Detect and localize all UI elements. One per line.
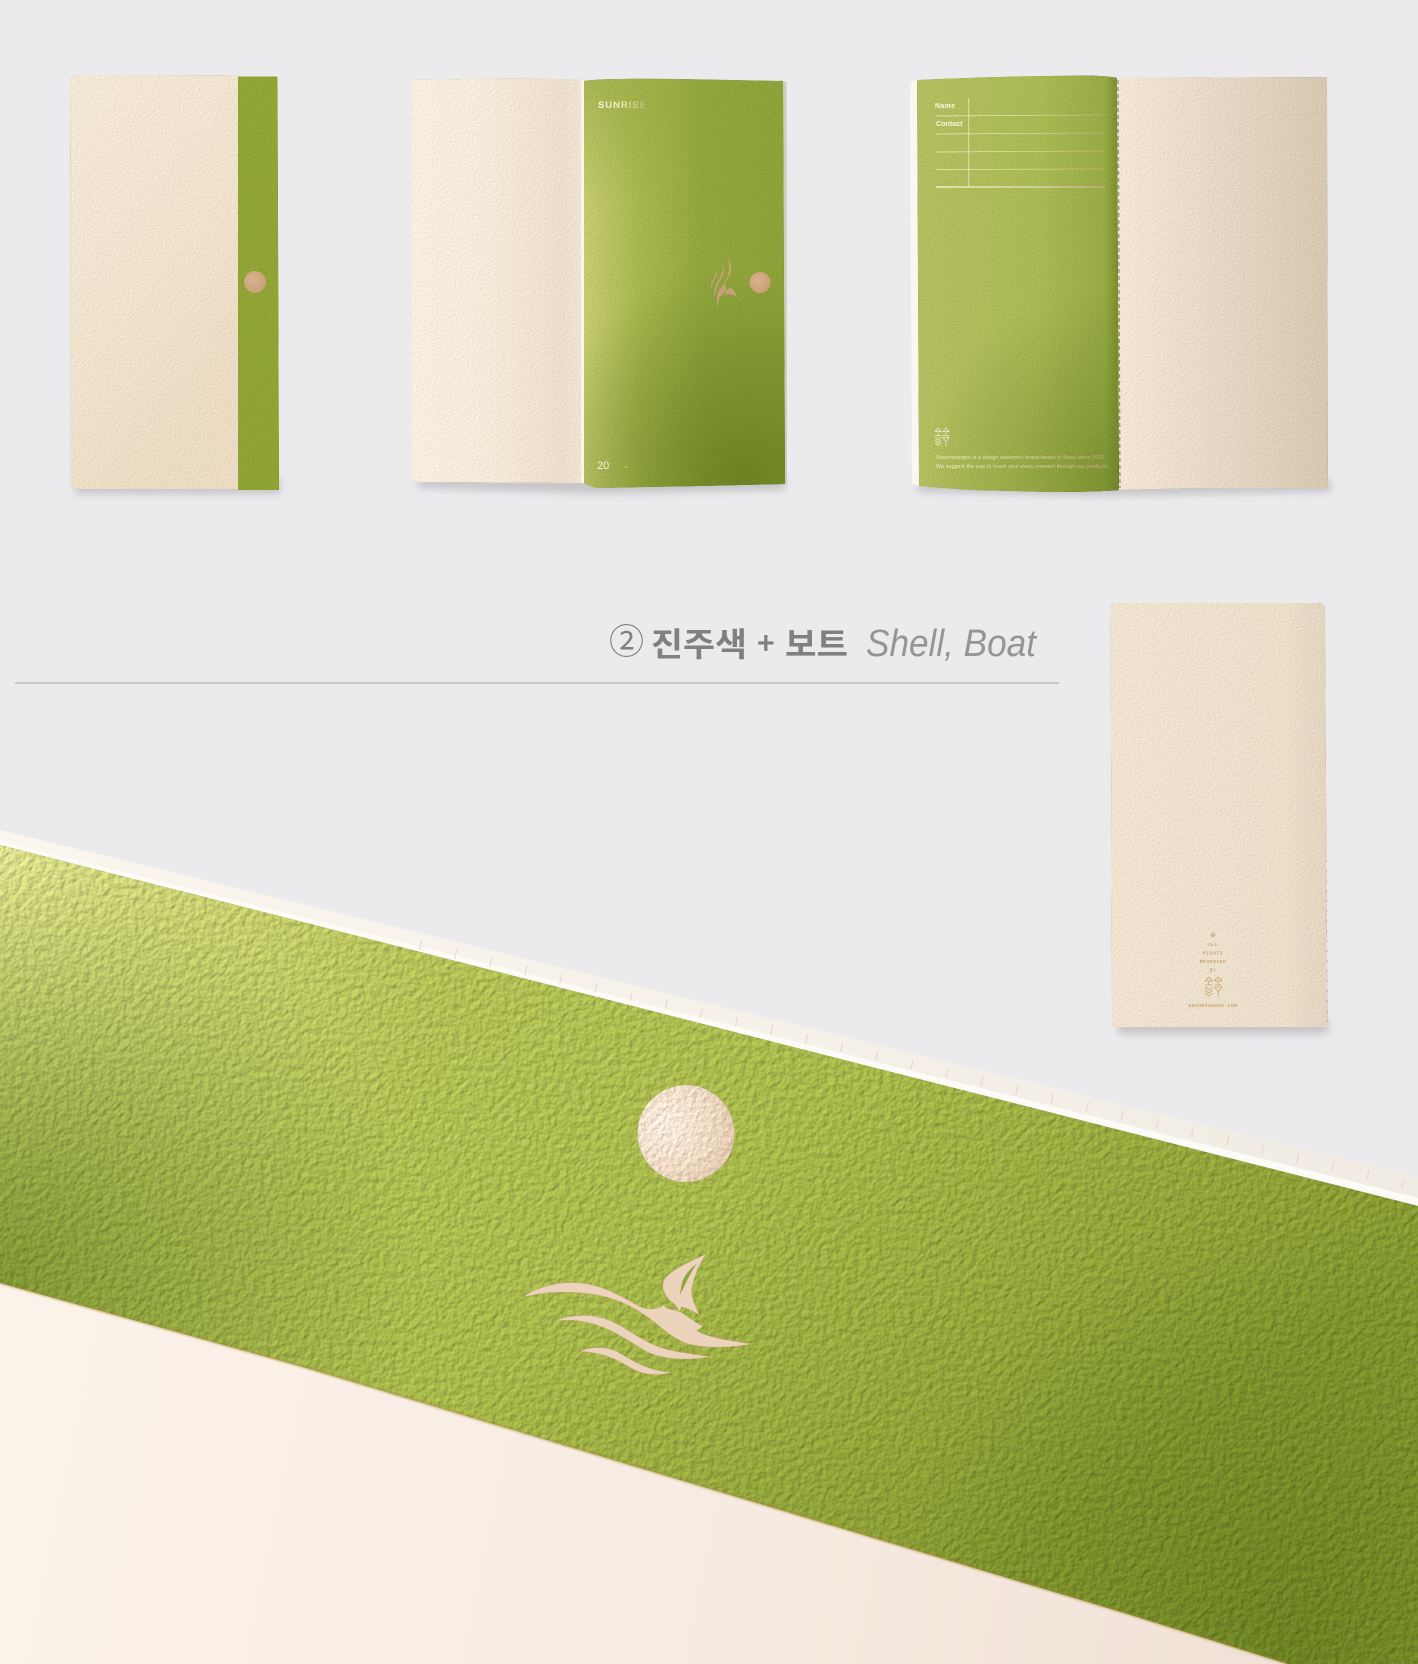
book 3 green page <box>917 76 1119 492</box>
book 4 stitches <box>1326 860 1328 1025</box>
book 2 green page <box>584 79 785 488</box>
page block strip <box>0 830 1418 1208</box>
English name: Shell, Boat <box>866 623 1037 665</box>
book 1 foil dot <box>244 271 266 293</box>
cream page close-up <box>0 1283 1288 1664</box>
book 1 green cover <box>238 76 279 490</box>
plus sign: + <box>757 619 775 663</box>
form lines <box>936 115 1105 187</box>
cover bottom edge <box>0 1283 1288 1664</box>
wave two <box>557 1315 710 1359</box>
wave three <box>581 1348 672 1375</box>
icon: rotated boat and waves <box>711 257 738 308</box>
green cover close-up <box>0 845 1418 1664</box>
Name label: Name <box>935 103 955 110</box>
copyright block: ALL <box>1208 942 1218 948</box>
wave one <box>526 1283 752 1347</box>
book 1 shadow <box>76 478 280 494</box>
SUNRISE title: SUNRISE <box>598 100 646 111</box>
sail <box>663 1254 706 1315</box>
book 2 page edge <box>780 80 787 485</box>
foil boat and waves <box>526 1254 752 1375</box>
small dot <box>625 466 627 468</box>
copyright block: RIGHTS <box>1203 950 1223 956</box>
brand logo <box>935 428 949 446</box>
brand description <box>936 455 1109 470</box>
book 3 cream right page <box>1119 77 1328 490</box>
foil sun <box>638 1085 734 1182</box>
book 2 stitched spine <box>581 80 584 483</box>
book 2 foil dot <box>750 272 770 293</box>
small emblem <box>1211 933 1215 937</box>
strip highlight <box>0 841 1418 1206</box>
book 2 cream left page <box>412 79 583 483</box>
copyright block <box>1188 933 1238 1009</box>
panel: close-up photo of cover <box>0 830 1418 1664</box>
heading: product option <box>609 618 1037 666</box>
heading rule <box>15 682 1059 684</box>
book 4 cover <box>1110 603 1328 1027</box>
book 4 shadow <box>1118 1018 1328 1034</box>
option number: ② <box>609 623 644 662</box>
book 2 shadow <box>418 478 786 494</box>
book 3 white page block <box>910 80 920 486</box>
form vertical line <box>968 98 970 187</box>
year label: 20 <box>597 460 609 472</box>
panel: closed notebook with cream flap <box>70 75 280 494</box>
panel: back cover <box>1110 603 1328 1034</box>
Korean name: 진주색 <box>651 618 747 666</box>
book 3 stitched spine <box>1118 80 1120 488</box>
contact form <box>935 98 1105 187</box>
copyright block: SOSOMOONGOO.COM <box>1188 1003 1238 1009</box>
copyright block: BY <box>1210 968 1216 974</box>
panel: open notebook, contact page <box>910 76 1332 496</box>
copyright block: RESERVED <box>1200 959 1226 965</box>
book 3 shadow <box>918 480 1332 496</box>
brand logo <box>1205 977 1222 997</box>
strip stitches <box>420 945 1418 1187</box>
sail cut-out <box>680 1264 697 1295</box>
brand description: Sosomoongoo is a design stationery brand based in Seoul since 2012. <box>936 455 1106 461</box>
Korean boat: 보트 <box>785 618 848 666</box>
panel: open notebook, SUNRISE page <box>412 79 787 494</box>
Contact label: Contact <box>936 121 963 128</box>
brand description: We suggest the way to touch your every moment through our products. <box>936 464 1109 470</box>
book 1 cream flap <box>70 75 238 489</box>
